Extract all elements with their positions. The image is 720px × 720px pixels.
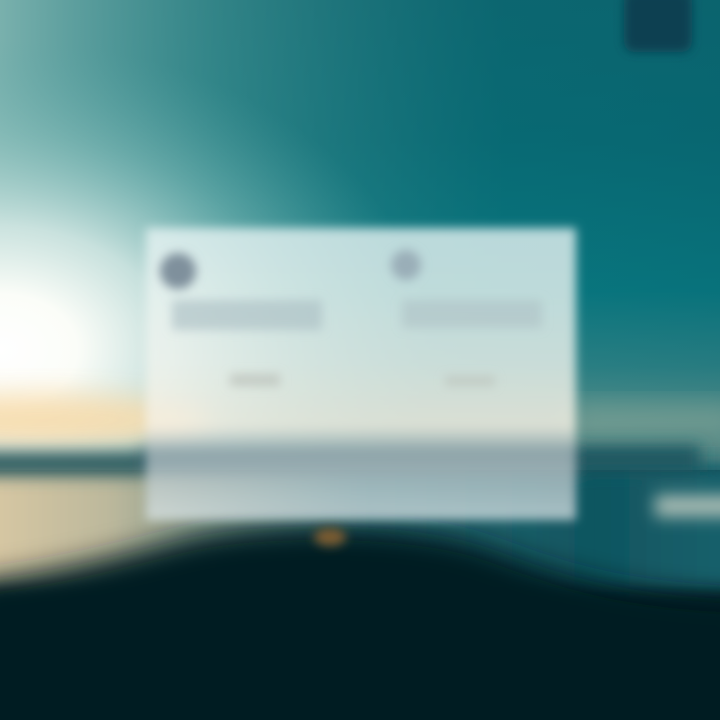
panel — [146, 228, 576, 520]
orange spot — [314, 528, 346, 546]
icon: left circle — [160, 253, 196, 289]
right text block — [402, 300, 542, 328]
sky background — [0, 0, 720, 470]
right card — [391, 250, 542, 328]
panel labels — [230, 374, 495, 386]
panel background — [146, 228, 576, 520]
sea and sand — [0, 462, 720, 592]
icon: right circle — [391, 250, 421, 280]
dark hill foreground — [0, 526, 720, 720]
horizon band — [0, 446, 720, 517]
left text block — [172, 300, 322, 330]
dark square top right — [624, 0, 692, 52]
left card — [160, 253, 322, 330]
horizon right glow — [570, 405, 720, 433]
